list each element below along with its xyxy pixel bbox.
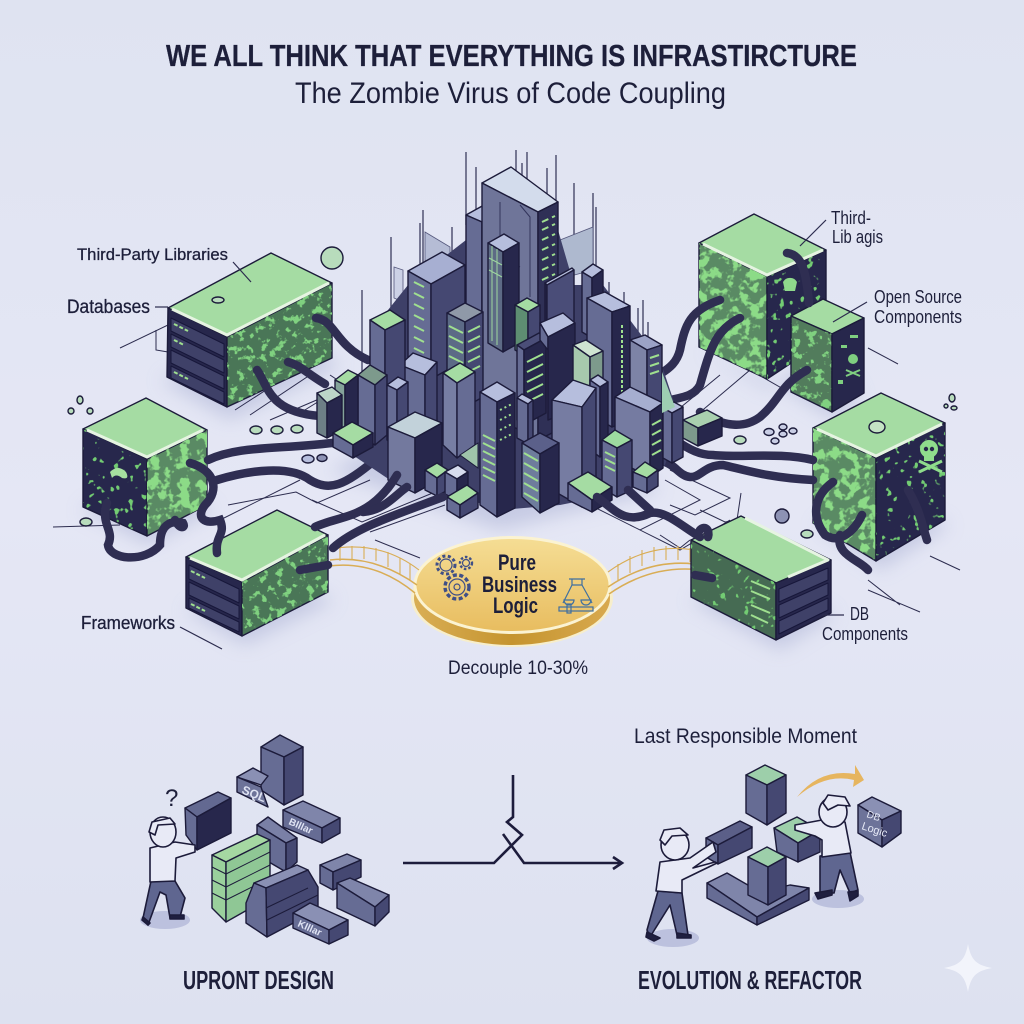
- block: brick stack: [246, 865, 318, 937]
- tower: wide front left: [388, 412, 442, 493]
- tower: right green windows: [602, 430, 632, 497]
- tower: left green cap: [370, 310, 405, 395]
- database box: zombie cube with skull: [813, 393, 945, 561]
- block: carried: [706, 821, 752, 864]
- circuit traces on the ground: [53, 265, 960, 612]
- block: billar: BIllar: [287, 817, 314, 837]
- city backing mass: [330, 230, 680, 510]
- icon: gears: [437, 556, 472, 599]
- tower: narrow green lit: [590, 375, 608, 457]
- label: db components: DB: [850, 604, 869, 624]
- label: upront design: UPRONT DESIGN: [183, 965, 334, 995]
- tower: green top front: [443, 363, 475, 458]
- low block: left green: [333, 422, 373, 458]
- label: third-lib agis: Third-: [831, 208, 871, 228]
- left figure with held block: [140, 785, 231, 929]
- block: green wall: [212, 834, 270, 922]
- tower: green striped: [447, 303, 483, 407]
- icon: question mark: ?: [165, 785, 178, 812]
- tower: narrow left: [387, 377, 408, 445]
- tower: main tall: [482, 167, 558, 440]
- tower: left middle: [400, 353, 437, 445]
- label: frameworks: Frameworks: [81, 613, 175, 633]
- business logic disc: [411, 536, 613, 647]
- label: open source components: Open Source: [874, 287, 962, 307]
- right vignette: refactor blocks: [706, 765, 901, 925]
- tower: outskirts: [335, 370, 358, 430]
- green patch on the dark face: [110, 468, 127, 478]
- low block: front green: [447, 485, 478, 518]
- database box: frameworks: [186, 510, 328, 636]
- ground shadows: [80, 340, 950, 650]
- held block: [185, 792, 231, 850]
- block: right small: [320, 854, 361, 890]
- block: tower: [746, 765, 786, 825]
- label: last responsible moment: Last Responsible Moment: [634, 725, 857, 748]
- label: pure business logic: Pure: [498, 550, 536, 575]
- tower: right with green column: [587, 292, 630, 427]
- low block: centre small: [425, 463, 448, 496]
- block: base: [707, 873, 809, 925]
- block: right long: [337, 878, 389, 926]
- block: middle pillar: [257, 817, 297, 872]
- low block: outer right: [683, 410, 722, 446]
- left refactor engineer: [646, 828, 717, 947]
- database box: third-party cube right: [699, 214, 826, 379]
- label: db components: [822, 604, 908, 644]
- tower: outskirts small: [317, 387, 342, 438]
- right bridge: [608, 546, 708, 594]
- tower: green stripes front: [522, 433, 559, 513]
- icon: orange move arrow: [797, 765, 864, 797]
- block: killar: [293, 903, 348, 944]
- isometric city of infrastructure: [317, 167, 722, 518]
- block: db logic cube: Logic: [860, 820, 889, 840]
- right refactor engineer: [795, 795, 864, 908]
- label: databases: Databases: [67, 297, 150, 318]
- label: open source components: [833, 287, 962, 327]
- glass slab: [460, 443, 478, 468]
- antennas and glass panels: [362, 150, 648, 400]
- label: decouple: Decouple 10-30%: [448, 658, 588, 679]
- database box: open source: [791, 299, 864, 412]
- label: pure business logic: Business: [482, 572, 557, 597]
- low block: right: [633, 462, 658, 493]
- label: pure business logic: [482, 550, 557, 618]
- label: third-lib agis: Lib agis: [832, 227, 883, 247]
- tower: left lower: [358, 365, 387, 445]
- icon: skull: [783, 278, 797, 291]
- glass triangle: [662, 372, 675, 413]
- block: green cap: [774, 817, 820, 862]
- block: tower top: [261, 735, 303, 805]
- title: WE ALL THINK THAT EVERYTHING IS INFRASTIRCTURE: [166, 38, 857, 73]
- drawer lights: [191, 571, 205, 611]
- low block: centre pale: [445, 465, 468, 500]
- block: sql: [237, 768, 268, 807]
- tower: windows front: [480, 382, 515, 517]
- left vignette: upfront design blocks: [212, 735, 389, 944]
- tower: right of main: [545, 268, 574, 340]
- cables behind the city: [208, 300, 813, 486]
- tower: dark centre with slats: [517, 333, 546, 425]
- tower: back left: [466, 205, 500, 312]
- block: db logic cube: DB: [865, 809, 882, 824]
- block: sql: SQL: [240, 783, 268, 805]
- label: frameworks: [81, 613, 222, 649]
- database box: db components: [691, 516, 831, 640]
- database box: databases: [167, 253, 332, 407]
- tower: small centre: [517, 394, 533, 444]
- tower: big left: [408, 252, 465, 379]
- left bridge: [329, 546, 419, 593]
- transition arrow: [403, 775, 622, 869]
- block: billar: [283, 801, 340, 843]
- drawer lights: [174, 324, 188, 379]
- icon: skull and crossbones: [919, 440, 942, 472]
- label: third-party libraries: Third-Party Libraries: [77, 245, 228, 264]
- tower: pale glass: [573, 340, 603, 402]
- icon: sparkle watermark: [944, 944, 992, 992]
- tower: dark capped: [540, 313, 575, 420]
- tower: far right: [630, 335, 662, 435]
- subtitle: The Zombie Virus of Code Coupling: [295, 77, 726, 110]
- label: third-party libraries: [77, 245, 251, 282]
- label: db components: Components: [822, 624, 908, 644]
- icon: lid: [869, 421, 885, 433]
- tower: slim centre: [488, 234, 519, 352]
- worried engineer: [142, 817, 195, 925]
- server drawers: [779, 568, 828, 634]
- cables in front of the city: [105, 253, 927, 578]
- icon: scales: [559, 579, 593, 613]
- status bars: [751, 581, 770, 623]
- low block: front right green: [568, 472, 612, 512]
- tower: right back: [582, 264, 603, 338]
- server drawers: [171, 318, 224, 404]
- label: third-lib agis: [800, 208, 883, 247]
- tower: green top centre: [515, 298, 540, 357]
- server drawers: [189, 565, 239, 632]
- block: killar: KIllar: [296, 919, 323, 939]
- label: evolution and refactor: EVOLUTION & REFACTOR: [638, 965, 862, 995]
- tower: right slim: [663, 402, 683, 463]
- label: open source components: Components: [874, 307, 962, 327]
- icon: skull and crossbones: [838, 335, 860, 384]
- tower: right slatted: [615, 387, 663, 477]
- database box: zombie cube left: [83, 398, 207, 536]
- block: db logic cube: [858, 797, 901, 847]
- block: pillar: [748, 847, 786, 905]
- label: pure business logic: Logic: [493, 593, 538, 618]
- small pucks and debris: [68, 247, 957, 538]
- tower: tall grey front: [552, 380, 596, 507]
